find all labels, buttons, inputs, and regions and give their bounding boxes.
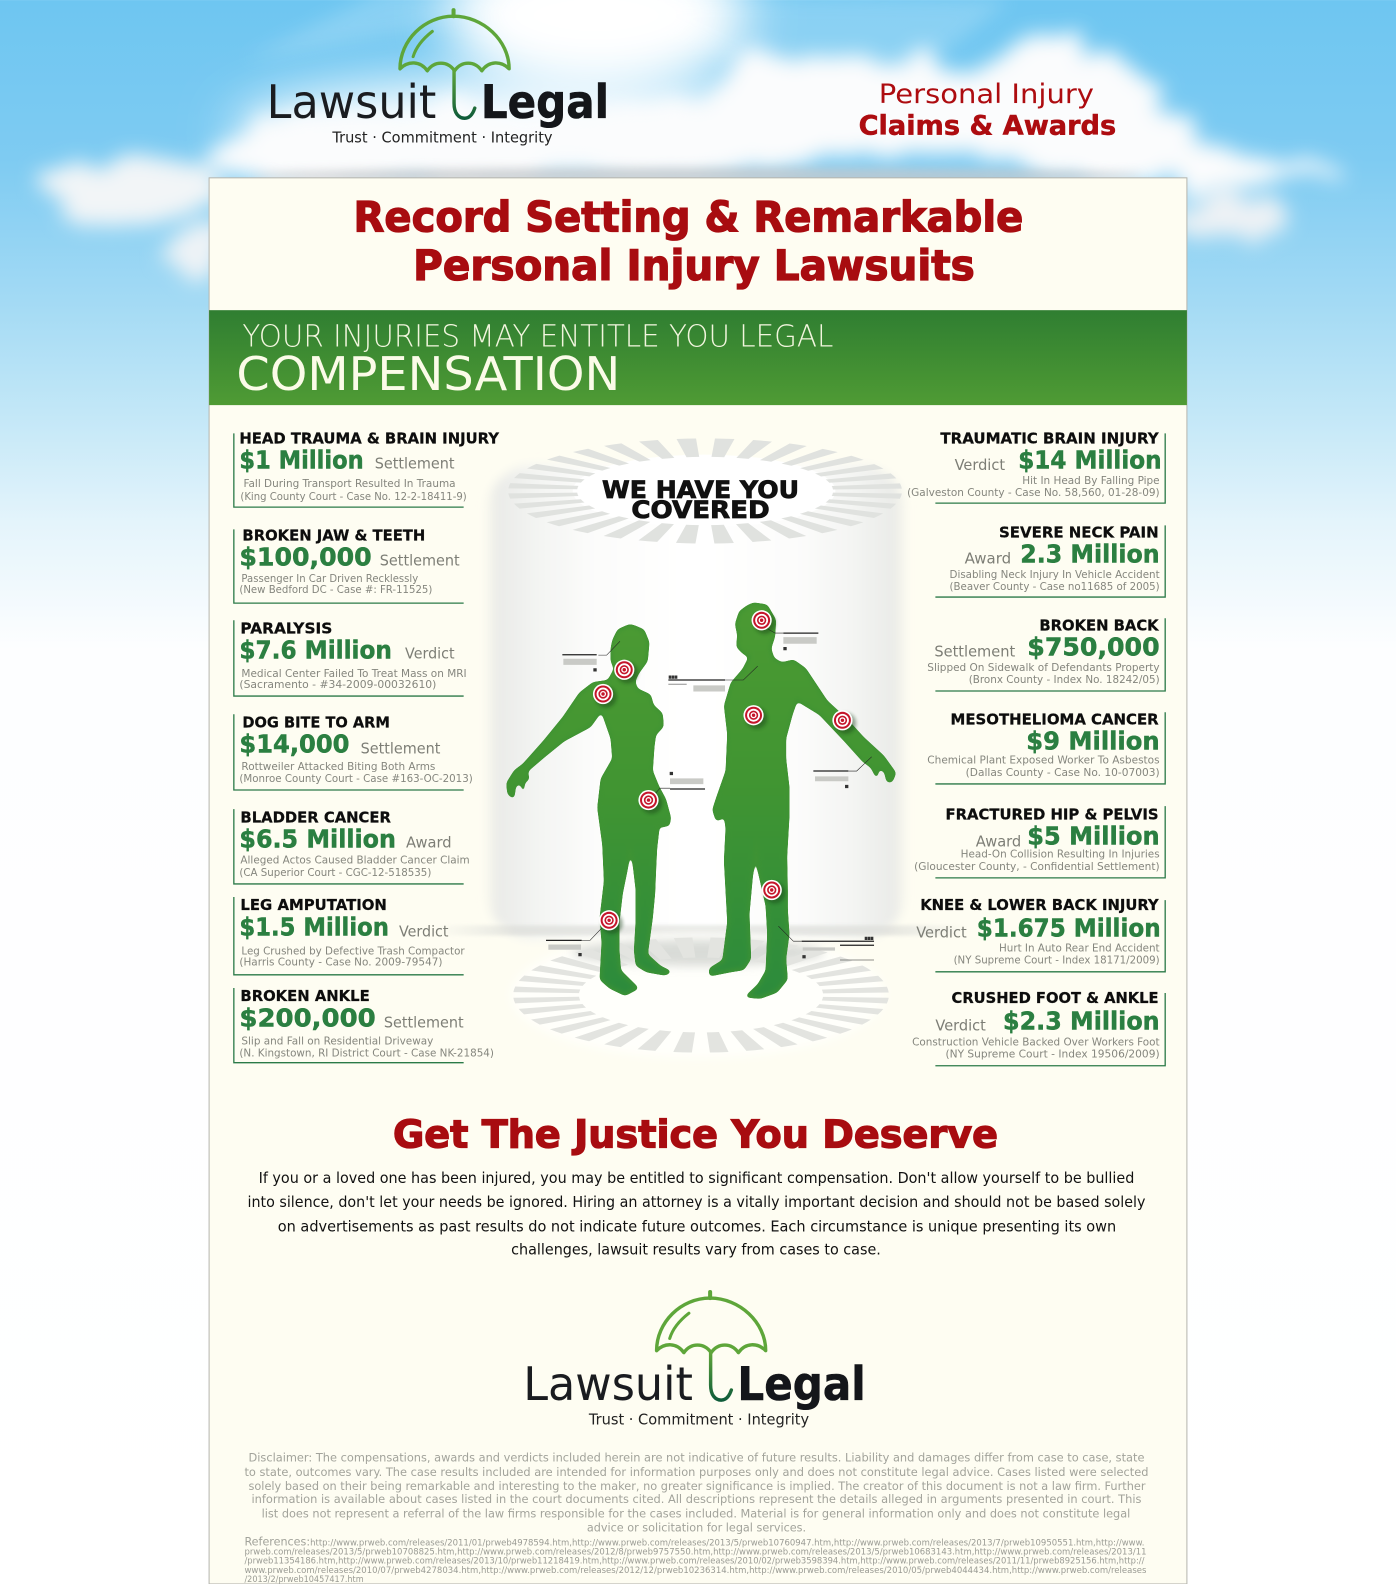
banner line one: YOUR INJURIES MAY ENTITLE YOU LEGAL <box>242 320 833 355</box>
case: dog bite: DOG BITE TO ARM <box>242 714 390 731</box>
tagline: Trust · Commitment · Integrity <box>588 1410 809 1428</box>
disclaimer: to state, outcomes vary. The case results included are intended for information purposes only and does not constitute legal advice. Cases listed were selected <box>244 1465 1149 1479</box>
case: crushed foot: $2.3 Million <box>1003 1006 1160 1035</box>
case: crushed foot: CRUSHED FOOT & ANKLE <box>952 990 1159 1007</box>
target: arm <box>832 710 856 734</box>
case: mesothelioma: (Dallas County - Case No. 10-07003) <box>966 766 1160 779</box>
case: mesothelioma: $9 Million <box>1026 727 1160 756</box>
title: Personal Injury Lawsuits <box>413 242 975 290</box>
case: broken jaw: Passenger In Car Driven Recklessly <box>241 572 419 585</box>
case: broken ankle: Settlement <box>384 1014 464 1031</box>
case: bladder cancer: Alleged Actos Caused Bladder Cancer Claim <box>240 854 470 867</box>
body paragraph: into silence, don't let your needs be ignored. Hiring an attorney is a vitally important decision and should not be based solely <box>247 1194 1146 1211</box>
body paragraph: on advertisements as past results do not indicate future outcomes. Each circumstance is unique presenting its own <box>278 1218 1116 1235</box>
case: severe neck pain <box>935 524 1165 597</box>
disclaimer: information is available about cases listed in the court documents cited. All descriptions represent the details alleged in arguments presented in court. This <box>252 1492 1141 1506</box>
case: fractured hip: Head-On Collision Resulting In Injuries <box>961 848 1160 861</box>
title <box>354 193 1023 290</box>
case: head trauma: HEAD TRAUMA & BRAIN INJURY <box>239 431 499 448</box>
case: severe neck pain: SEVERE NECK PAIN <box>999 524 1159 541</box>
target markers <box>593 610 856 934</box>
body paragraph <box>247 1170 1146 1259</box>
floor shadow <box>572 939 824 966</box>
target: chest <box>743 705 767 729</box>
bottom ray burst <box>546 948 856 1043</box>
case: leg amputation: (Harris County - Case No. 2009-79547) <box>239 956 442 969</box>
case: traumatic brain injury: Hit In Head By Falling Pipe <box>1022 474 1160 487</box>
header logo: Legal <box>481 75 609 129</box>
target: man knee <box>762 880 785 904</box>
case: severe neck pain: Disabling Neck Injury In Vehicle Accident <box>950 568 1160 581</box>
case: traumatic brain injury: TRAUMATIC BRAIN INJURY <box>940 431 1159 448</box>
case: broken back <box>927 617 1165 691</box>
case: bladder cancer: Award <box>406 835 452 852</box>
banner line two: COMPENSATION <box>236 347 620 401</box>
references: www.prweb.com/releases/2010/07/prweb4278034.htm,http://www.prweb.com/releases/2012/12/prweb10236314.htm,http://www.prweb.com/releases/2010/05/prweb4044434.htm,http://www.prweb.com/releases <box>244 1566 1147 1576</box>
top ray burst <box>543 448 868 534</box>
case: head trauma: Fall During Transport Resulted In Trauma <box>243 477 456 490</box>
case: head trauma: $1 Million <box>239 446 364 475</box>
centre illustration <box>434 448 970 1058</box>
disclaimer: Disclaimer: The compensations, awards and verdicts included herein are not indicative of future results. Liability and damages differ from case to case, state <box>248 1451 1144 1465</box>
target: woman knee <box>599 910 623 934</box>
case: dog bite: Settlement <box>361 741 441 758</box>
floor <box>511 932 885 1058</box>
case: severe neck pain: Award <box>965 551 1011 568</box>
top burst centre <box>573 455 835 527</box>
case: knee and lower back: (NY Supreme Court - Index 18171/2009) <box>954 954 1160 967</box>
left column of cases <box>234 431 499 1063</box>
tagline: Trust · Commitment · Integrity <box>331 128 553 146</box>
heading: we have you covered: COVERED <box>631 495 770 524</box>
header tagline: claims and awards <box>859 80 1116 141</box>
footer logo: Legal <box>737 1357 866 1411</box>
case: dog bite: (Monroe County Court - Case #163-OC-2013) <box>239 772 473 785</box>
case: broken jaw <box>234 527 464 603</box>
figure: man silhouette <box>710 603 895 998</box>
case: paralysis: Verdict <box>405 646 455 663</box>
footer logo <box>523 1292 866 1428</box>
case: fractured hip: FRACTURED HIP & PELVIS <box>945 806 1159 823</box>
target: hip <box>638 790 662 814</box>
small annotation callouts <box>546 628 874 960</box>
case: crushed foot: Verdict <box>935 1017 986 1034</box>
case: paralysis: (Sacramento - #34-2009-00032610) <box>239 678 436 691</box>
icon: umbrella <box>657 1292 766 1400</box>
case: knee and lower back: Verdict <box>916 924 967 941</box>
case: broken ankle: $200,000 <box>239 1003 376 1032</box>
case: traumatic brain injury <box>907 431 1165 503</box>
case: leg amputation: LEG AMPUTATION <box>240 897 387 914</box>
case: fractured hip <box>914 806 1165 878</box>
body paragraph: If you or a loved one has been injured, you may be entitled to significant compensation. Don't allow yourself to be bullied <box>259 1170 1134 1187</box>
case: broken jaw: $100,000 <box>239 543 372 572</box>
case: broken back: BROKEN BACK <box>1039 617 1159 634</box>
case: broken jaw: BROKEN JAW & TEETH <box>242 527 425 544</box>
white cylinder backdrop <box>485 465 907 939</box>
case: fractured hip: $5 Million <box>1027 822 1160 851</box>
disclaimer: list does not represent a referral of the law firms responsible for the cases included. Material is for general information only and does not constitute legal <box>262 1506 1130 1520</box>
references: /prweb11354186.htm,http://www.prweb.com/releases/2013/10/prweb11218419.htm,http://www.prweb.com/releases/2010/02/prweb3598394.htm,http://www.prweb.com/releases/2011/11/prweb8925156.htm,http:// <box>244 1557 1145 1567</box>
figure: woman silhouette <box>507 625 670 995</box>
case: paralysis: PARALYSIS <box>240 620 332 637</box>
case: knee and lower back <box>916 897 1165 972</box>
case: head trauma: (King County Court - Case No. 12-2-18411-9) <box>240 490 467 503</box>
case: dog bite: Rottweiler Attacked Biting Both Arms <box>241 760 436 773</box>
case: bladder cancer: $6.5 Million <box>239 825 396 854</box>
case: bladder cancer: BLADDER CANCER <box>240 809 391 826</box>
heading: we have you covered: WE HAVE YOU <box>602 475 799 504</box>
target: shoulder <box>593 684 617 708</box>
wordmark: Lawsuit <box>523 1357 693 1411</box>
clouds <box>45 0 1356 273</box>
case: severe neck pain: (Beaver County - Case no11685 of 2005) <box>950 580 1160 593</box>
case: broken ankle: BROKEN ANKLE <box>240 988 370 1005</box>
case: broken back: Slipped On Sidewalk of Defendants Property <box>927 661 1160 674</box>
right column of cases <box>907 431 1165 1066</box>
case: mesothelioma: MESOTHELIOMA CANCER <box>951 711 1159 728</box>
green banner <box>209 310 1187 405</box>
heading: we have you covered <box>602 475 799 524</box>
references: http://www.prweb.com/releases/2011/01/prweb4978594.htm,http://www.prweb.com/releases/2013/5/prweb10760947.htm,http://www.prweb.com/releases/2013/7/prweb10950551.htm,http://www. <box>310 1539 1144 1549</box>
icon: umbrella <box>400 10 509 118</box>
case: knee and lower back: Hurt In Auto Rear End Accident <box>999 942 1160 955</box>
case: severe neck pain: 2.3 Million <box>1020 540 1160 569</box>
target: head <box>752 610 775 634</box>
case: knee and lower back: KNEE & LOWER BACK INJURY <box>920 897 1159 914</box>
case: broken back: (Bronx County - Index No. 18242/05) <box>969 673 1160 686</box>
case: leg amputation: $1.5 Million <box>239 912 389 941</box>
case: broken ankle: (N. Kingstown, RI District Court - Case NK-21854) <box>239 1047 494 1060</box>
case: crushed foot: (NY Supreme Court - Index 19506/2009) <box>945 1048 1160 1061</box>
title: Record Setting & Remarkable <box>354 193 1023 241</box>
references: References: <box>244 1535 310 1549</box>
disclaimer <box>244 1451 1149 1534</box>
case: broken jaw: (New Bedford DC - Case #: FR-11525) <box>239 583 432 596</box>
main panel <box>209 178 1187 1584</box>
disclaimer: advice or solicitation for legal services. <box>587 1520 806 1534</box>
heading: get the justice you deserve: Get The Justice You Deserve <box>393 1113 998 1158</box>
body paragraph: challenges, lawsuit results vary from cases to case. <box>511 1242 881 1259</box>
references: prweb.com/releases/2013/5/prweb10708825.htm,http://www.prweb.com/releases/2012/8/prweb9757550.htm,http://www.prweb.com/releases/2013/5/prweb10683143.htm,http://www.prweb.com/releases/2013/11 <box>244 1548 1146 1558</box>
case: crushed foot: Construction Vehicle Backed Over Workers Foot <box>912 1036 1160 1049</box>
case: broken back: Settlement <box>934 644 1015 661</box>
case: head trauma: Settlement <box>375 456 455 473</box>
case: traumatic brain injury: (Galveston County - Case No. 58,560, 01-28-09) <box>907 486 1160 499</box>
case: bladder cancer <box>234 809 470 884</box>
header logo <box>267 10 609 146</box>
case: broken jaw: Settlement <box>380 553 460 570</box>
case: fractured hip: Award <box>976 834 1021 851</box>
case: traumatic brain injury: Verdict <box>955 457 1005 474</box>
case: fractured hip: (Gloucester County, - Confidential Settlement) <box>914 860 1160 873</box>
case: crushed foot <box>912 990 1165 1066</box>
case: leg amputation: Leg Crushed by Defective Trash Compactor <box>241 945 465 958</box>
case: broken back: $750,000 <box>1027 633 1160 662</box>
references <box>244 1535 1147 1584</box>
case: bladder cancer: (CA Superior Court - CGC-12-518535) <box>239 866 431 879</box>
case: leg amputation: Verdict <box>399 923 449 940</box>
case: mesothelioma: Chemical Plant Exposed Worker To Asbestos <box>927 754 1160 767</box>
disclaimer: solely based on their being remarkable and interesting to the maker, no greater significance is implied. The creator of this document is not a law firm. Further <box>248 1479 1146 1493</box>
header tagline: claims and awards: Personal Injury <box>879 80 1094 110</box>
header tagline: claims and awards: Claims & Awards <box>859 111 1116 141</box>
case: paralysis <box>234 620 467 696</box>
case: dog bite: $14,000 <box>239 730 350 759</box>
target: neck <box>614 660 638 683</box>
case: broken ankle <box>234 988 494 1063</box>
case: leg amputation <box>234 897 465 975</box>
case: broken ankle: Slip and Fall on Residential Driveway <box>241 1035 434 1048</box>
case: dog bite <box>234 714 473 790</box>
case: head trauma <box>234 431 499 507</box>
case: mesothelioma <box>927 711 1165 784</box>
floor band <box>434 925 970 935</box>
case: paralysis: Medical Center Failed To Treat Mass on MRI <box>241 667 467 680</box>
wordmark: Lawsuit <box>267 75 436 129</box>
case: paralysis: $7.6 Million <box>239 636 392 665</box>
case: knee and lower back: $1.675 Million <box>977 913 1161 942</box>
case: traumatic brain injury: $14 Million <box>1018 446 1162 475</box>
